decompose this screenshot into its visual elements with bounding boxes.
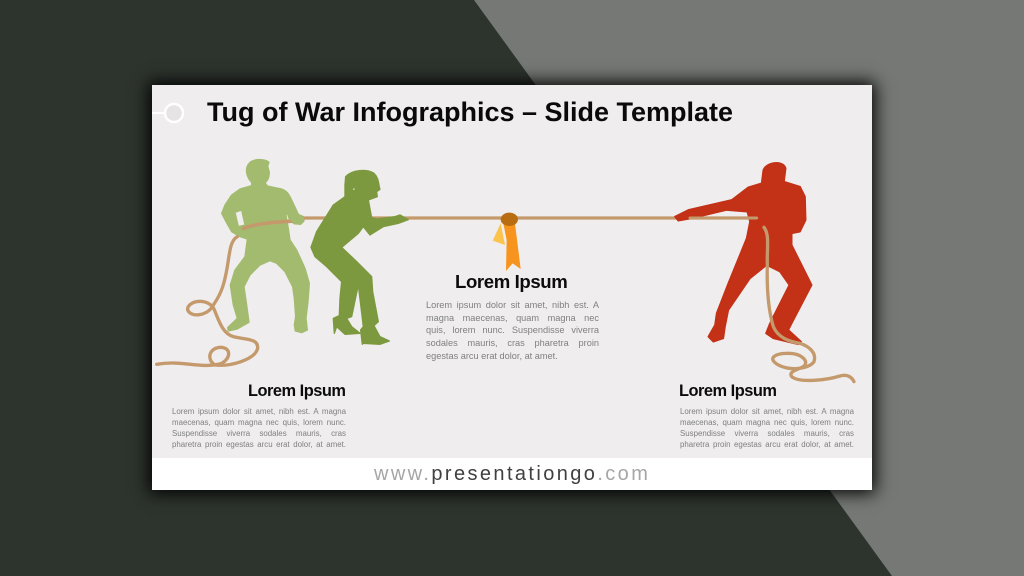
text: center: egestas arcu erat dolor, at amet. bbox=[426, 351, 558, 361]
text: center: sodales mauris, cras pharetra proin bbox=[426, 338, 599, 348]
text: right: Lorem ipsum dolor sit amet, nibh est. A magna bbox=[680, 407, 854, 416]
rope: right line over red figure bbox=[690, 218, 854, 382]
text: right: maecenas, quam magna nec quis, lorem nunc. bbox=[680, 418, 854, 427]
text: left: maecenas, quam magna nec quis, lorem nunc. bbox=[172, 418, 346, 427]
text: left bbox=[172, 407, 346, 449]
text: center: magna maecenas, quam magna nec bbox=[426, 313, 599, 323]
man hand over rope bbox=[288, 214, 304, 224]
text: left: Lorem ipsum dolor sit amet, nibh est. A magna bbox=[172, 407, 346, 416]
heading: left: Lorem Ipsum bbox=[248, 382, 345, 400]
text: right: Suspendisse viverra sodales mauris, cras bbox=[680, 429, 854, 438]
icon: ribbon marker bbox=[493, 213, 521, 271]
text: left: pharetra proin egestas arcu erat dolor, at amet. bbox=[172, 440, 346, 449]
title: Tug of War Infographics – Slide Template bbox=[207, 97, 733, 127]
text: center bbox=[426, 300, 599, 361]
slide panel bbox=[152, 85, 872, 490]
figure: woman pulling, dark green bbox=[311, 170, 408, 344]
figure: man pulling, red bbox=[675, 163, 812, 344]
heading: right: Lorem Ipsum bbox=[679, 382, 776, 400]
text: center: Lorem ipsum dolor sit amet, nibh est. A bbox=[426, 300, 599, 310]
text: left: Suspendisse viverra sodales mauris, cras bbox=[172, 429, 346, 438]
heading: center: Lorem Ipsum bbox=[455, 271, 567, 292]
figure: man pulling, light green bbox=[222, 160, 309, 333]
rope: main line bbox=[300, 216, 755, 220]
text: right bbox=[680, 407, 854, 449]
text: right: pharetra proin egestas arcu erat dolor, at amet. bbox=[680, 440, 854, 449]
rope: left coil bbox=[157, 221, 297, 365]
title marker icon bbox=[152, 103, 184, 123]
footer url: www.presentationgo.com bbox=[374, 463, 650, 485]
text: center: quis, lorem nunc. Suspendisse viverra bbox=[426, 325, 599, 335]
